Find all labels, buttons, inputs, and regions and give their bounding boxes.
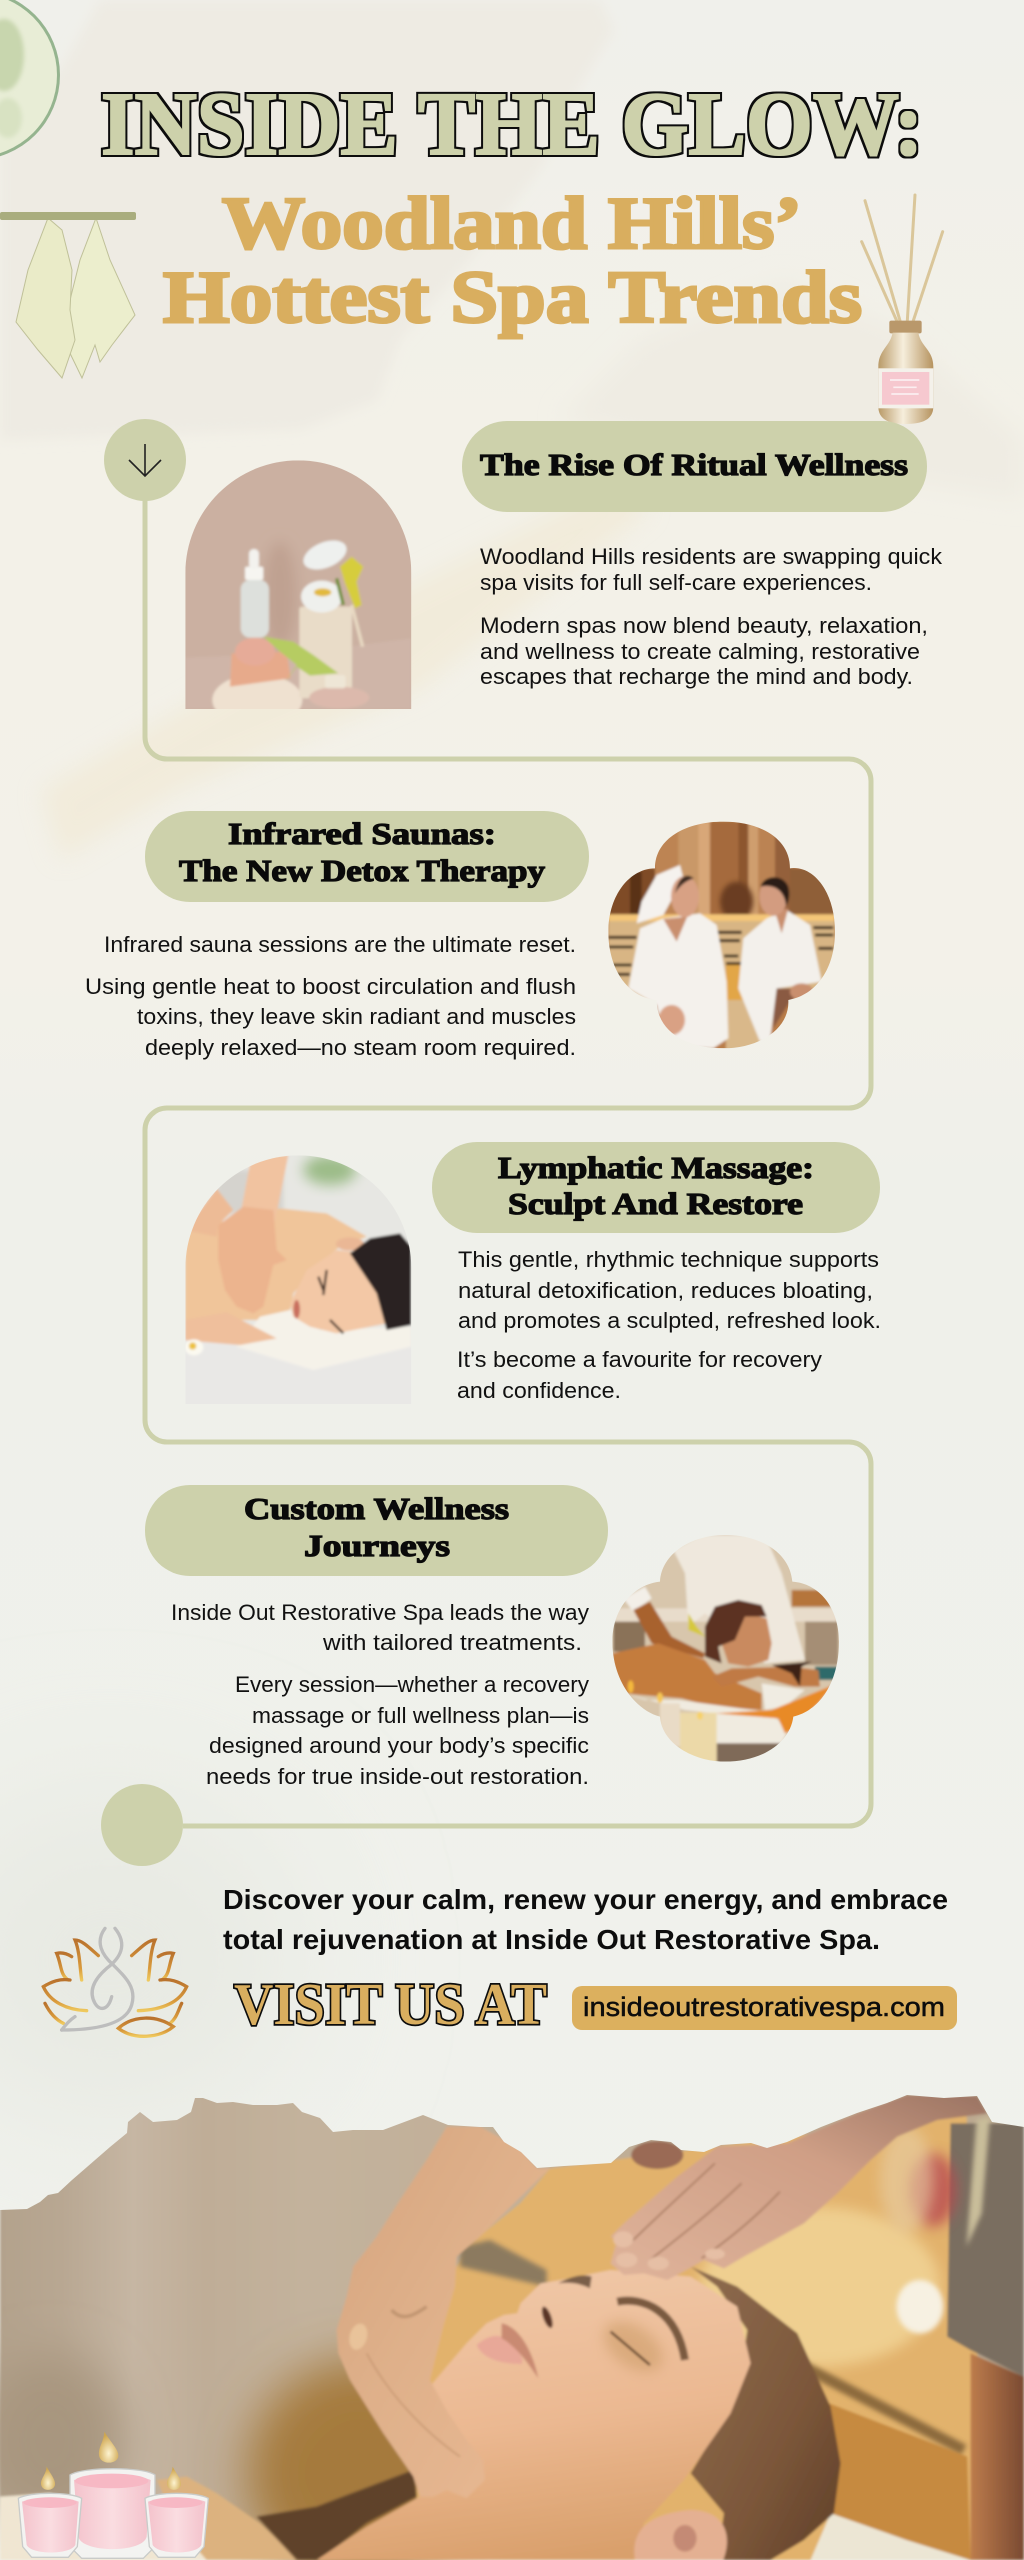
subtitle: Woodland Hills’: [222, 183, 802, 265]
subtitle: Hottest Spa Trends: [163, 257, 862, 339]
icon: pink candles: [18, 2432, 208, 2558]
text: custom wellness body: massage or full wellness plan—is: [252, 1703, 589, 1728]
panel: infrared saunas: [85, 811, 840, 1060]
text: ritual wellness body: [480, 544, 943, 689]
heading: lymphatic massage: [432, 1142, 880, 1233]
text: custom wellness body: Inside Out Restorative Spa leads the way: [171, 1600, 590, 1625]
text: ritual wellness body: and wellness to create calming, restorative: [480, 639, 920, 664]
heading: infrared saunas: Infrared Saunas:: [228, 816, 496, 851]
heading: the rise of ritual wellness: The Rise Of Ritual Wellness: [480, 447, 908, 482]
call to action text: Discover your calm, renew your energy, and embrace: [223, 1884, 948, 1915]
text: custom wellness body: [171, 1600, 590, 1789]
text: ritual wellness body: spa visits for full self-care experiences.: [480, 570, 872, 595]
call to action text: total rejuvenation at Inside Out Restorative Spa.: [223, 1924, 880, 1955]
heading: custom wellness journeys: Custom Wellness: [244, 1491, 509, 1526]
text: lymphatic massage body: [457, 1247, 881, 1403]
icon: end circle: [101, 1784, 183, 1866]
connector line: [145, 500, 871, 1826]
text: lymphatic massage body: This gentle, rhythmic technique supports: [458, 1247, 879, 1272]
visit us at label: VISIT US AT: [234, 1971, 547, 2037]
icon: hanging towels: [0, 212, 136, 378]
text: lymphatic massage body: and promotes a sculpted, refreshed look.: [458, 1308, 881, 1333]
heading: custom wellness journeys: Journeys: [304, 1528, 450, 1563]
icon: reed diffuser: [862, 195, 943, 424]
text: infrared saunas body: Using gentle heat to boost circulation and flush: [85, 974, 576, 999]
photo: massage with candles: [612, 1535, 839, 1762]
icon: lotus logo: [43, 1928, 187, 2036]
text: infrared saunas body: toxins, they leave skin radiant and muscles: [137, 1004, 576, 1029]
text: custom wellness body: with tailored treatments.: [322, 1630, 582, 1655]
panel: lymphatic massage: [180, 1142, 881, 1410]
title: INSIDE THE GLOW:: [101, 75, 923, 174]
call to action text: [223, 1884, 948, 1955]
photo: women in sauna: [608, 822, 835, 1048]
hair: [691, 2267, 841, 2560]
photo: spa products: [186, 460, 412, 709]
photo: facial massage with torn paper edge: [0, 2080, 1024, 2560]
hand under jaw: [337, 2127, 550, 2498]
text: lymphatic massage body: and confidence.: [457, 1378, 621, 1403]
website link pill: [572, 1986, 957, 2030]
text: lymphatic massage body: natural detoxification, reduces bloating,: [458, 1278, 873, 1303]
text: infrared saunas body: deeply relaxed—no steam room required.: [145, 1035, 576, 1060]
icon: cucumber slice: [0, 0, 60, 160]
website link pill: insideoutrestorativespa.com: [583, 1992, 945, 2022]
heading: lymphatic massage: Lymphatic Massage:: [498, 1150, 814, 1185]
heading: infrared saunas: [145, 811, 589, 902]
text: custom wellness body: needs for true inside-out restoration.: [206, 1764, 589, 1789]
text: custom wellness body: Every session—whether a recovery: [235, 1672, 590, 1697]
text: ritual wellness body: Woodland Hills residents are swapping quick: [480, 544, 943, 569]
icon: start circle with arrow: [104, 419, 186, 501]
heading: infrared saunas: The New Detox Therapy: [179, 853, 546, 888]
text: custom wellness body: designed around your body’s specific: [209, 1733, 589, 1758]
text: ritual wellness body: escapes that recharge the mind and body.: [480, 664, 913, 689]
heading: custom wellness journeys: [145, 1485, 608, 1576]
heading: the rise of ritual wellness: [462, 421, 927, 512]
panel: ritual wellness: [180, 421, 943, 726]
photo: back massage: [180, 1150, 420, 1410]
panel: custom wellness journeys: [145, 1485, 845, 1789]
text: infrared saunas body: Infrared sauna sessions are the ultimate reset.: [104, 932, 576, 957]
heading: lymphatic massage: Sculpt And Restore: [508, 1186, 803, 1221]
face and neck: [317, 2270, 751, 2560]
ear: [634, 2510, 727, 2560]
text: lymphatic massage body: It’s become a favourite for recovery: [457, 1347, 823, 1372]
text: infrared saunas body: [85, 932, 576, 1060]
subtitle: [163, 183, 862, 339]
hand on forehead: [631, 2141, 683, 2169]
text: ritual wellness body: Modern spas now blend beauty, relaxation,: [480, 613, 928, 638]
